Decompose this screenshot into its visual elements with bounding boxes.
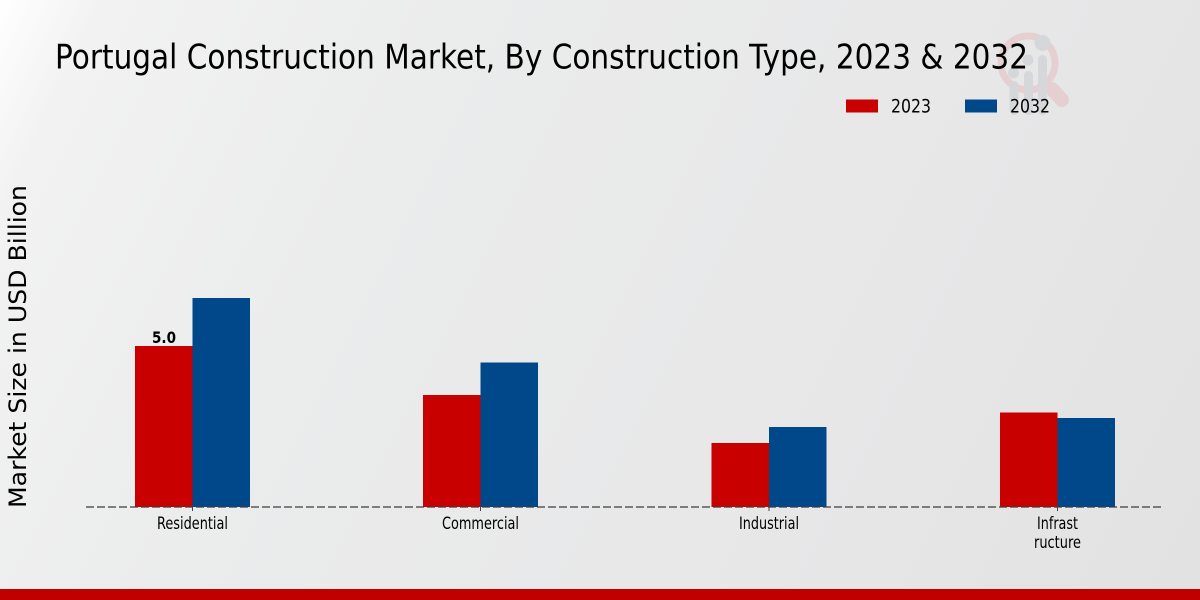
bars: Infrastructure bbox=[1000, 412, 1115, 507]
legend item: 2032: 2032 bbox=[1010, 96, 1050, 118]
category label: Infrastructure bbox=[1034, 514, 1081, 552]
legend item: 2023: 2023 bbox=[891, 96, 931, 118]
data label: 5.0: 5.0 bbox=[152, 328, 176, 347]
x axis ticks bbox=[192, 507, 1058, 511]
bars: Residential bbox=[135, 298, 250, 507]
bar chart bbox=[86, 298, 1164, 552]
icon: watermark logo bbox=[1001, 35, 1062, 115]
legend item: 2023 bbox=[846, 96, 931, 118]
footer bar bbox=[0, 589, 1200, 600]
category label: Infrastructure: ructure bbox=[1034, 533, 1081, 552]
bars: Industrial bbox=[712, 427, 826, 507]
category label: Residential: Residential bbox=[157, 514, 228, 533]
legend item: 2032 bbox=[965, 96, 1050, 118]
category label: Infrastructure: Infrast bbox=[1037, 514, 1078, 533]
legend bbox=[846, 96, 1050, 118]
y axis label: Market Size in USD Billion bbox=[4, 185, 32, 508]
x axis baseline bbox=[86, 506, 1164, 508]
bars: Commercial bbox=[423, 362, 538, 507]
category label: Commercial: Commercial bbox=[442, 514, 519, 533]
category label: Industrial: Industrial bbox=[739, 514, 799, 533]
title: Portugal Construction Market, By Construction Type, 2023 & 2032 bbox=[55, 38, 1028, 78]
